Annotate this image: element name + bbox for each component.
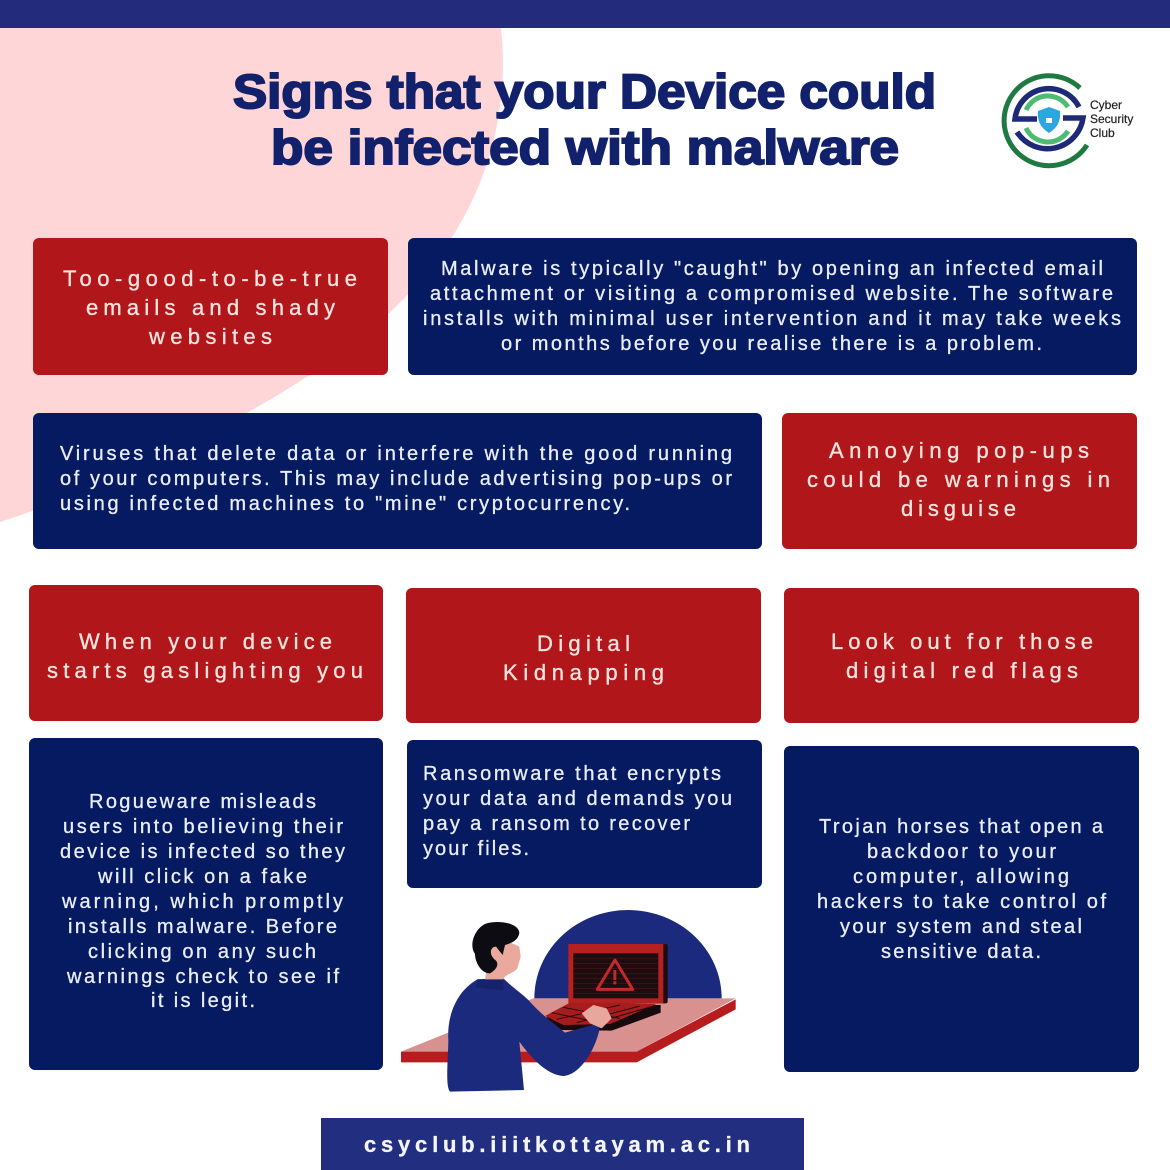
panel: trojan horses description: [784, 746, 1139, 1072]
panel: how malware is caught: or months before you realise there is a problem.: [501, 333, 1042, 355]
panel: trojan horses description: hackers to take control of: [817, 891, 1106, 913]
panel: trojan horses description: computer, allowing: [853, 866, 1069, 888]
panel: how malware is caught: installs with minimal user intervention and it may take weeks: [423, 308, 1121, 330]
panel: rogueware description: it is legit.: [151, 990, 255, 1012]
panel: trojan horses description: your system and steal: [840, 916, 1082, 938]
panel: gaslighting heading: starts gaslighting you: [47, 658, 363, 683]
panel: viruses description: of your computers. This may include advertising pop-ups or: [60, 468, 732, 490]
panel: gaslighting heading: When your device: [79, 629, 332, 654]
panel: how malware is caught: attachment or visiting a compromised website. The software: [430, 283, 1113, 305]
panel: viruses description: Viruses that delete data or interfere with the good running: [60, 443, 732, 465]
panel: viruses description: using infected machines to "mine" cryptocurrency.: [60, 493, 630, 515]
panel: rogueware description: Rogueware misleads: [89, 791, 316, 813]
panel: red flags heading: [784, 588, 1139, 723]
illustration: person at laptop with warning: [401, 910, 736, 1092]
logo: Cyber Security Club: [1004, 76, 1133, 166]
panel: digital kidnapping heading: [406, 588, 761, 723]
pink background shape: [0, 28, 503, 522]
panel: rogueware description: will click on a fake: [97, 866, 307, 888]
panel: gaslighting heading: [29, 585, 383, 721]
footer: website bar: [321, 1118, 804, 1170]
panel: viruses description: [33, 413, 762, 549]
panel: rogueware description: clicking on any such: [88, 941, 316, 963]
logo: Cyber Security Club: Cyber: [1090, 98, 1122, 112]
panel: annoying pop-ups heading: disguise: [901, 496, 1016, 521]
panel: rogueware description: [29, 738, 383, 1070]
panel: rogueware description: installs malware. Before: [68, 916, 337, 938]
panel: rogueware description: warnings check to see if: [66, 966, 339, 988]
logo: Cyber Security Club: Club: [1090, 126, 1115, 140]
panel: ransomware description: Ransomware that encrypts: [423, 763, 721, 785]
panel: ransomware description: your data and demands you: [423, 788, 732, 810]
panel: red flags heading: Look out for those: [831, 629, 1093, 654]
footer: website bar: csyclub.iiitkottayam.ac.in: [364, 1132, 750, 1157]
panel: digital kidnapping heading: Digital: [537, 631, 630, 656]
panel: digital kidnapping heading: Kidnapping: [503, 660, 664, 685]
panel: red flags heading: digital red flags: [846, 658, 1078, 683]
panel: trojan horses description: sensitive data.: [881, 941, 1041, 963]
panel: too-good-to-be-true heading: [33, 238, 388, 375]
title: [233, 66, 936, 175]
title: Signs that your Device could: [233, 66, 936, 119]
panel: too-good-to-be-true heading: Too-good-to-be-true: [63, 266, 357, 291]
panel: too-good-to-be-true heading: emails and shady: [86, 295, 335, 320]
panel: annoying pop-ups heading: could be warnings in: [807, 467, 1110, 492]
panel: rogueware description: warning, which promptly: [61, 891, 343, 913]
panel: how malware is caught: [408, 238, 1137, 375]
panel: trojan horses description: Trojan horses that open a: [819, 816, 1104, 838]
panel: too-good-to-be-true heading: websites: [148, 324, 272, 349]
panel: rogueware description: users into believing their: [63, 816, 343, 838]
panel: trojan horses description: backdoor to your: [867, 841, 1056, 863]
panel: rogueware description: device is infected so they: [60, 841, 345, 863]
panel: ransomware description: your files.: [423, 838, 529, 860]
title: be infected with malware: [271, 122, 899, 175]
top bar: [0, 0, 1170, 28]
panel: ransomware description: [407, 740, 762, 888]
panel: how malware is caught: Malware is typically "caught" by opening an infected email: [441, 258, 1103, 280]
panel: annoying pop-ups heading: [782, 413, 1137, 549]
panel: ransomware description: pay a ransom to recover: [423, 813, 690, 835]
logo: Cyber Security Club: Security: [1090, 112, 1133, 126]
panel: annoying pop-ups heading: Annoying pop-ups: [829, 438, 1089, 463]
